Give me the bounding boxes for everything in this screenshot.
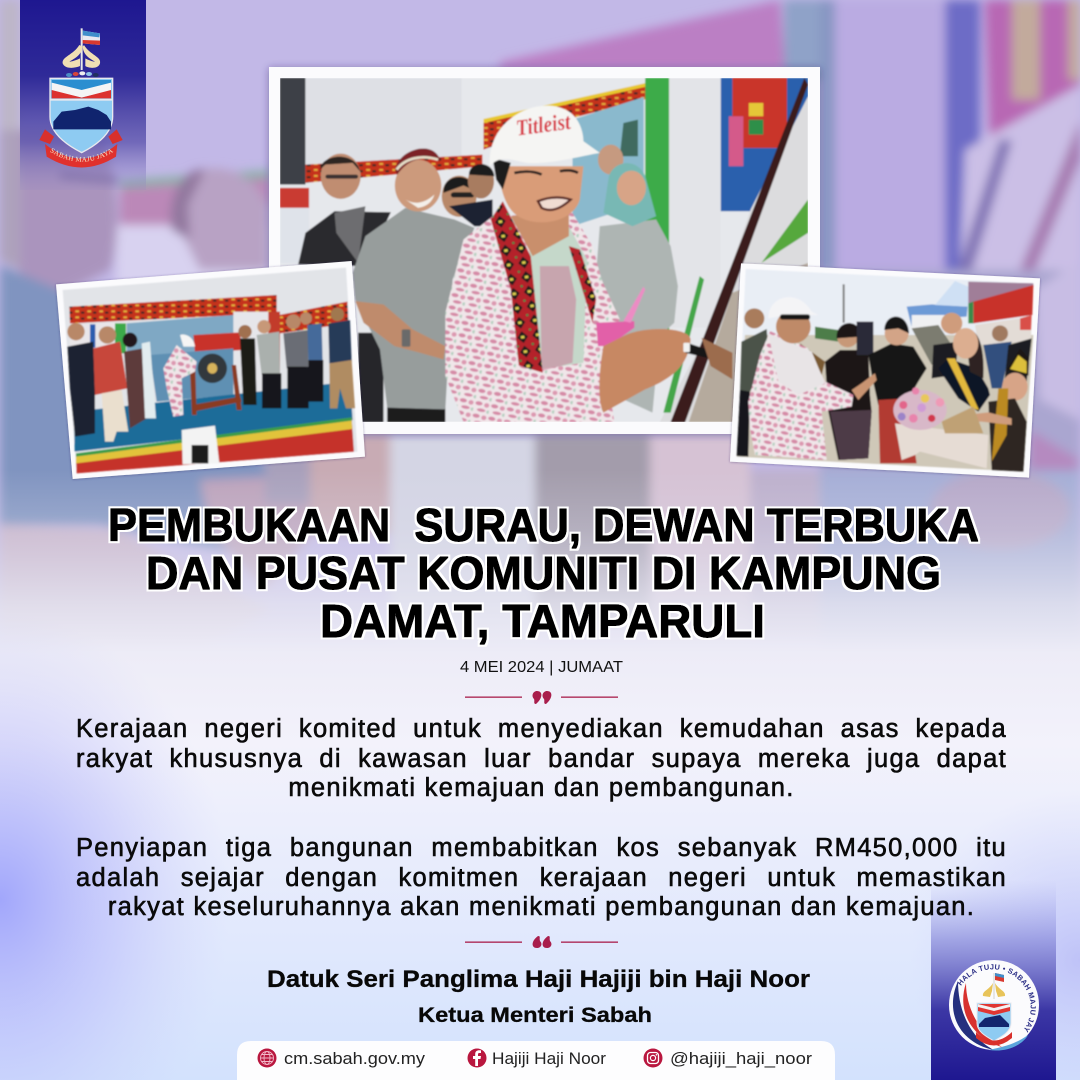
facebook name: Hajiji Haji Noor (492, 1049, 606, 1068)
title (108, 499, 979, 647)
title: DAN PUSAT KOMUNITI DI KAMPUNG (146, 547, 941, 599)
body paragraph one: menikmati kemajuan dan pembangunan. (288, 774, 795, 802)
photo frame (730, 263, 1040, 478)
icon: Sabah coat of arms (39, 28, 123, 168)
title: DAMAT, TAMPARULI (320, 595, 765, 647)
quote attribution role: Ketua Menteri Sabah (418, 1003, 652, 1027)
woman in teal hijab (596, 163, 678, 413)
icon: facebook (468, 1048, 486, 1068)
photo frame (56, 261, 365, 479)
body paragraph two: Penyiapan tiga bangunan membabitkan kos sebanyak RM450,000 itu (76, 834, 1007, 862)
body paragraph two: rakyat keseluruhannya akan menikmati pembangunan dan kemajuan. (108, 893, 975, 921)
quote attribution name: Datuk Seri Panglima Haji Hajiji bin Haji Noor (267, 966, 810, 993)
main man (445, 106, 732, 422)
instagram handle: @hajiji_haji_noor (670, 1049, 812, 1068)
right photo: bouquet welcome (730, 263, 1040, 478)
main photo (269, 67, 820, 434)
gong (190, 354, 242, 415)
icon: Sabah coat of arms: SABAH MAJU JAYA (50, 148, 114, 162)
icon: Hala Tuju Sabah Maju Jaya badge: HALA TUJU • SABAH MAJU JAYA (957, 964, 1036, 1033)
website: cm.sabah.gov.my (284, 1049, 426, 1068)
chief minister (748, 297, 877, 460)
divider: opening quote (465, 936, 618, 948)
body paragraph one: rakyat khususnya di kawasan luar bandar supaya mereka juga dapat (76, 744, 1007, 772)
body paragraph one: Kerajaan negeri komited untuk menyediakan kemudahan asas kepada (76, 715, 1007, 743)
crowd (737, 308, 1032, 472)
body paragraph two (76, 834, 1007, 921)
body paragraph two: adalah sejajar dengan komitmen kerajaan negeri untuk memastikan (76, 864, 1007, 892)
main man: Titleist (514, 110, 573, 141)
contact bar (237, 1041, 835, 1080)
divider: closing quote (465, 691, 618, 704)
people (67, 308, 355, 442)
icon: globe (258, 1048, 276, 1068)
man with glasses (298, 154, 391, 266)
men in background (442, 164, 494, 226)
top-left blue banner (20, 0, 146, 190)
title: PEMBUKAAN SURAU, DEWAN TERBUKA (108, 499, 979, 551)
photo frame (269, 67, 820, 434)
left photo: gong ceremony (56, 261, 365, 479)
date: 4 MEI 2024 | JUMAAT (460, 659, 624, 676)
body paragraph one (76, 715, 1007, 802)
icon: instagram (644, 1048, 662, 1068)
bottom-right blue banner (931, 880, 1056, 1080)
man in grey shirt (353, 148, 474, 422)
bouquet and basket (893, 387, 988, 468)
